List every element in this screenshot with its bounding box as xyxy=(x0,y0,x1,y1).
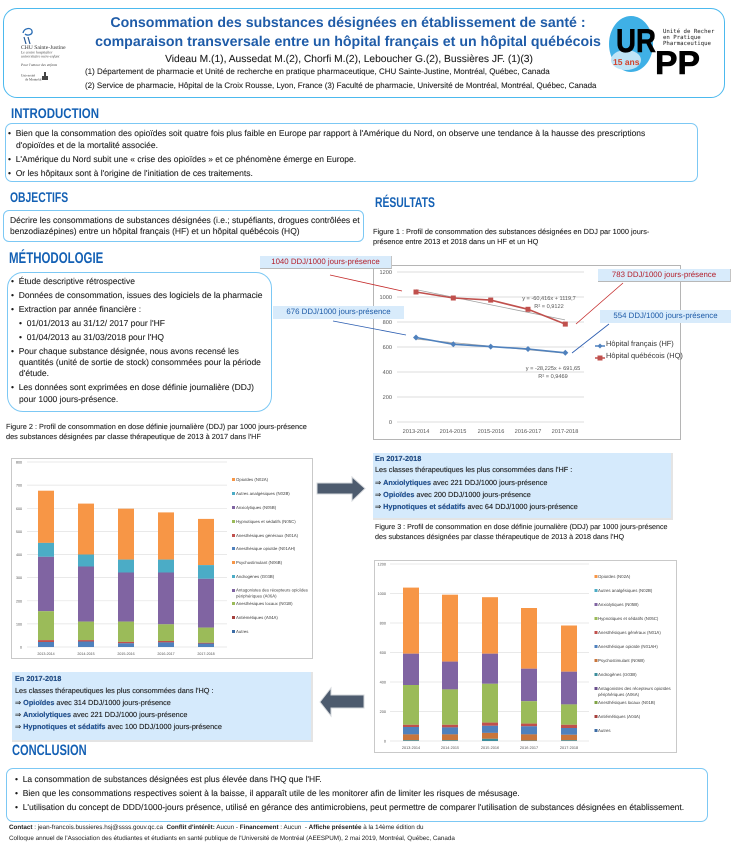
HQ findings text: Les classes thérapeutiques les plus consommées dans l'HQ : xyxy=(15,686,214,695)
footer: contact and credits: Colloque annuel de l'Association des étudiantes et étudiants en santé publique de l'Université de Montréal (AEESPUM), 2 mai 2019, Montréal, Québec, Canada xyxy=(9,835,455,842)
panel: HQ findings xyxy=(12,672,313,742)
heading: introduction: INTRODUCTION xyxy=(11,105,99,121)
stacked bars HQ plot: Opioïdes (N02A) xyxy=(598,574,631,579)
stacked bars HQ plot: 2014-2015 xyxy=(441,746,459,750)
introduction text: • L'Amérique du Nord subit une « crise des opioïdes » et ce phénomène émerge en Europe. xyxy=(8,154,356,164)
heading: méthodologie: MÉTHODOLOGIE xyxy=(9,250,103,267)
stacked bars HF plot: 2013-2014 xyxy=(37,652,55,656)
panel: introduction xyxy=(5,123,698,182)
stacked bars HQ plot: Anesthésiques généraux (N01A) xyxy=(598,630,661,635)
line chart plot xyxy=(380,270,584,435)
stacked bars HF plot: 200 xyxy=(16,599,22,603)
chart: stacked bars figure 3 xyxy=(374,560,677,753)
stacked bars HF plot: Opioïdes (N02A) xyxy=(236,477,269,482)
stacked bars HF plot: 500 xyxy=(16,530,22,534)
legend: line chart: Hôpital français (HF) xyxy=(606,339,674,348)
caption: figure 3: des substances désignées par classe thérapeutique de 2013 à 2018 dans l'HQ xyxy=(375,533,624,541)
stacked bars HF plot: 400 xyxy=(16,553,22,557)
stacked bars HF plot: Androgènes (G03B) xyxy=(236,574,275,579)
introduction text: • Bien que la consommation des opioïdes soit quatre fois plus faible en Europe par rapport à l'Amérique du Nord, on observe une tendance à la hausse des prescriptions xyxy=(8,128,645,138)
logo: URPP 15 ans: Unité de Recher xyxy=(663,28,715,35)
stacked bars HF plot: 0 xyxy=(20,646,22,650)
caption: figure 3 xyxy=(375,523,668,541)
panel: HF findings xyxy=(373,453,673,520)
stacked bars HF plot: 600 xyxy=(16,507,22,511)
callout: 676 xyxy=(273,306,404,319)
line chart plot: R² = 0,9122 xyxy=(534,304,564,310)
heading: objectifs: OBJECTIFS xyxy=(10,189,68,205)
line chart plot: 2013-2014 xyxy=(403,429,429,435)
méthodologie text: pour 1000 jours-présence. xyxy=(19,394,118,404)
arrow: right to HF findings xyxy=(316,476,366,502)
footer: contact and credits: Contact : jean-francois.bussieres.hsj@ssss.gouv.qc.ca Conflit d'intérêt: Aucun - Financement : Aucun - Affiche présentée à la 14ème édition du xyxy=(9,824,423,831)
stacked bars HQ plot: 2013-2014 xyxy=(402,746,420,750)
line chart plot: 2014-2015 xyxy=(440,429,466,435)
méthodologie text: • Données de consommation, issues des logiciels de la pharmacie xyxy=(11,290,262,300)
stacked bars HQ plot: périphériques (A06A) xyxy=(598,692,640,697)
title xyxy=(95,15,601,50)
caption: figure 2: Figure 2 : Profil de consommation en dose définie journalière (DDJ) par 1000 jours-présence xyxy=(6,422,307,431)
stacked bars HQ plot: Anxiolytiques (N05B) xyxy=(598,602,639,607)
HF findings text: En 2017-2018 xyxy=(375,454,421,463)
line chart plot: 400 xyxy=(383,370,392,376)
callout: 1040: 1040 DDJ/1000 jours-présence xyxy=(271,257,380,266)
callout leader lines xyxy=(330,274,624,354)
méthodologie text: • Les données sont exprimées en dose définie journalière (DDJ) xyxy=(11,382,254,392)
stacked bars HF plot: Antagonistes des récepteurs opioïdes xyxy=(236,588,308,592)
callout: 554 xyxy=(600,310,731,323)
stacked bars HF plot: Autres analgésiques (N02B) xyxy=(236,491,290,496)
objectifs text: Décrire les consommations de substances désignées (i.e.; stupéfiants, drogues contrôlées et xyxy=(10,215,360,225)
stacked bars HQ plot: 400 xyxy=(380,680,386,684)
line chart plot: 600 xyxy=(383,345,392,351)
méthodologie text: d'étude. xyxy=(19,368,49,378)
line chart plot: 2016-2017 xyxy=(515,429,541,435)
stacked bars HF plot: 700 xyxy=(16,484,22,488)
panel: header xyxy=(3,8,725,98)
logo: URPP 15 ans: 15 ans xyxy=(613,57,640,67)
caption: figure 2: des substances désignées par classe thérapeutique de 2013 à 2017 dans l'HF xyxy=(6,432,261,441)
HF findings text: ⇒ Hypnotiques et sédatifs avec 64 DDJ/1000 jours-présence xyxy=(375,502,578,511)
introduction text: • Or les hôpitaux sont à l'origine de l'initiation de ces traitements. xyxy=(8,168,253,178)
conclusion text: • La consommation de substances désignées est plus élevée dans l'HQ que l'HF. xyxy=(15,774,322,784)
logo: CHU Sainte-Justine xyxy=(20,28,66,82)
footer: contact and credits xyxy=(9,824,455,842)
stacked bars HQ plot: Antagonistes des récepteurs opioïdes xyxy=(598,686,672,691)
stacked bars HQ plot: 0 xyxy=(384,740,386,744)
stacked bars HF plot: Antiémétiques (A04A) xyxy=(236,615,278,620)
stacked bars HQ plot: Autres analgésiques (N02B) xyxy=(598,588,653,593)
stacked bars HF plot: Anesthésique opioïde (N01AH) xyxy=(236,546,296,551)
stacked bars HQ plot: 2017-2018 xyxy=(560,746,578,750)
stacked bars HQ plot: Hypnotiques et sédatifs (N05C) xyxy=(598,616,659,621)
line chart plot: 2015-2016 xyxy=(478,429,504,435)
logo: CHU Sainte-Justine: CHU Sainte-Justine xyxy=(21,45,66,51)
caption: figure 3: Figure 3 : Profil de consommation en dose définie journalière (DDJ) par 1000 jours-présence xyxy=(375,523,668,531)
title: Consommation des substances désignées en établissement de santé : xyxy=(110,15,586,31)
introduction text: d'opioïdes et de la mortalité associée. xyxy=(16,140,158,150)
heading: conclusion: CONCLUSION xyxy=(12,742,87,759)
méthodologie text: • Extraction par année financière : xyxy=(11,304,141,314)
chart: stacked bars figure 2 xyxy=(11,458,313,659)
stacked bars HF plot: Psychostimulant (N06B) xyxy=(236,560,283,565)
stacked bars HF plot: Autres xyxy=(236,629,248,634)
stacked bars HQ plot: Anesthésiques locaux (N01B) xyxy=(598,700,656,705)
stacked bars HF plot: Hypnotiques et sédatifs (N05C) xyxy=(236,519,296,524)
HQ findings text: ⇒ Anxiolytiques avec 221 DDJ/1000 jours-présence xyxy=(15,710,187,719)
line chart plot: 1000 xyxy=(380,295,392,301)
stacked bars HQ plot: 600 xyxy=(380,651,386,655)
logo: CHU Sainte-Justine: Le centre hospitalier xyxy=(20,50,53,54)
stacked bars HF plot: Anxiolytiques (N05B) xyxy=(236,505,277,510)
line chart plot: y = -60,416x + 1119,7 xyxy=(522,296,576,302)
affiliation 1: (1) Département de pharmacie et Unité de recherche en pratique pharmaceutique, CHU Sainte-Justine, Montréal, Québec, Canada xyxy=(85,67,550,76)
caption: figure 1 xyxy=(373,227,650,246)
callout: 554: 554 DDJ/1000 jours-présence xyxy=(613,311,718,320)
callout: 783: 783 DDJ/1000 jours-présence xyxy=(612,270,716,279)
stacked bars HQ plot: Antiémétiques (A04A) xyxy=(598,714,641,719)
HF findings text: ⇒ Opioïdes avec 200 DDJ/1000 jours-présence xyxy=(375,490,531,499)
line chart plot: 2017-2018 xyxy=(552,429,578,435)
introduction text xyxy=(8,128,645,178)
stacked bars HQ plot: Autres xyxy=(598,728,611,733)
callout: 1040 xyxy=(260,256,392,269)
stacked bars HF plot: 300 xyxy=(16,576,22,580)
conclusion text: • Bien que les consommations respectives soient à la baisse, il apparaît utile de les monitorer afin de limiter les risques de mésusage. xyxy=(15,788,520,798)
stacked bars HF plot: 2015-2016 xyxy=(117,652,135,656)
stacked bars HF plot: 100 xyxy=(16,622,22,626)
panel: objectifs xyxy=(3,210,364,242)
stacked bars HQ plot: Androgènes (G03B) xyxy=(598,672,637,677)
heading: résultats: RÉSULTATS xyxy=(375,194,435,210)
stacked bars HF plot: Anesthésiques locaux (N01B) xyxy=(236,601,293,606)
panel: conclusion xyxy=(6,768,708,822)
méthodologie text: • Pour chaque substance désignée, nous avons recensé les xyxy=(11,346,239,356)
objectifs text xyxy=(10,215,360,236)
stacked bars HF plot: périphériques (A06A) xyxy=(236,594,277,598)
line chart plot: 200 xyxy=(383,395,392,401)
stacked bars HQ plot: 1000 xyxy=(378,592,386,596)
logo: CHU Sainte-Justine: universitaire mère-enfant xyxy=(21,54,60,58)
logo: CHU Sainte-Justine: Université xyxy=(21,74,36,78)
stacked bars HQ plot: 2016-2017 xyxy=(520,746,538,750)
logo: URPP 15 ans xyxy=(609,16,715,77)
caption: figure 1: Figure 1 : Profil de consommation des substances désignées en DDJ par 1000 jours- xyxy=(373,227,649,236)
HF findings text: Les classes thérapeutiques les plus consommées dans l'HF : xyxy=(375,465,572,474)
méthodologie text xyxy=(11,276,262,404)
méthodologie text: • 01/04/2013 au 31/03/2018 pour l'HQ xyxy=(19,332,164,342)
logo: URPP 15 ans: Pharmaceutique xyxy=(663,40,712,47)
stacked bars HQ plot: Anesthésique opioïde (N01AH) xyxy=(598,644,658,649)
HQ findings text: ⇒ Opioïdes avec 314 DDJ/1000 jours-présence xyxy=(15,698,171,707)
legend: line chart: Hôpital québécois (HQ) xyxy=(606,351,683,360)
authors: Videau M.(1), Aussedat M.(2), Chorfi M.(2), Leboucher G.(2), Bussières JF. (1)(3) xyxy=(165,54,533,65)
callout: 783 xyxy=(598,269,731,282)
logo: CHU Sainte-Justine: de Montréal xyxy=(25,78,42,82)
méthodologie text: quantités (unité de sortie de stock) consommées pour la période xyxy=(19,357,261,367)
méthodologie text: • 01/01/2013 au 31/12/ 2017 pour l'HF xyxy=(19,318,165,328)
stacked bars HQ plot: Psychostimulant (N06B) xyxy=(598,658,645,663)
logo: URPP 15 ans: en Pratique xyxy=(663,34,701,41)
caption: figure 1: présence entre 2013 et 2018 dans un HF et un HQ xyxy=(373,237,538,246)
méthodologie text: • Étude descriptive rétrospective xyxy=(11,276,135,286)
panel: méthodologie xyxy=(7,272,272,412)
stacked bars HF plot: 2016-2017 xyxy=(157,652,175,656)
stacked bars HF plot: Anesthésiques généraux (N01A) xyxy=(236,533,299,538)
stacked bars HQ plot: 2015-2016 xyxy=(481,746,499,750)
line chart plot: 0 xyxy=(389,420,392,426)
HF findings text xyxy=(375,454,578,511)
line chart plot: y = -28,225x + 691,65 xyxy=(526,366,580,372)
conclusion text xyxy=(15,774,684,812)
title: comparaison transversale entre un hôpital français et un hôpital québécois xyxy=(95,34,601,50)
logo: CHU Sainte-Justine: Pour l'amour des enfants xyxy=(20,63,58,67)
affiliation 2: (2) Service de pharmacie, Hôpital de la Croix Rousse, Lyon, France (3) Faculté de pharmacie, Université de Montréal, Montréal, Québec, Canada xyxy=(85,81,596,90)
stacked bars HQ plot: 200 xyxy=(380,710,386,714)
arrow: left to HQ findings xyxy=(320,686,364,718)
conclusion text: • L'utilisation du concept de DDD/1000-jours présence, utilisé en gérance des antimicrobiens, peut permettre de comparer l'utilisation de substances désignées en établissement. xyxy=(15,802,684,812)
HQ findings text: En 2017-2018 xyxy=(15,674,61,683)
stacked bars HF plot: 800 xyxy=(16,460,22,464)
callout: 676: 676 DDJ/1000 jours-présence xyxy=(286,307,391,316)
stacked bars HQ plot xyxy=(378,562,672,750)
chart: line chart figure 1 xyxy=(373,265,681,440)
stacked bars HF plot: 2017-2018 xyxy=(197,652,215,656)
stacked bars HF plot xyxy=(16,460,308,656)
HQ findings text: ⇒ Hypnotiques et sédatifs avec 100 DDJ/1000 jours-présence xyxy=(15,722,222,731)
stacked bars HQ plot: 1200 xyxy=(378,562,386,566)
stacked bars HQ plot: 800 xyxy=(380,622,386,626)
caption: figure 2 xyxy=(6,422,307,441)
stacked bars HF plot: 2014-2015 xyxy=(77,652,95,656)
HQ findings text xyxy=(15,674,222,731)
line chart plot: 800 xyxy=(383,320,392,326)
line chart plot: R² = 0,9469 xyxy=(538,374,568,380)
logo: URPP 15 ans: UR xyxy=(616,22,656,59)
legend: line chart xyxy=(595,339,683,360)
line chart plot: 1200 xyxy=(380,270,392,276)
objectifs text: benzodiazépines) entre un hôpital français (HF) et un hôpital québécois (HQ) xyxy=(10,226,300,236)
HF findings text: ⇒ Anxiolytiques avec 221 DDJ/1000 jours-présence xyxy=(375,478,547,487)
